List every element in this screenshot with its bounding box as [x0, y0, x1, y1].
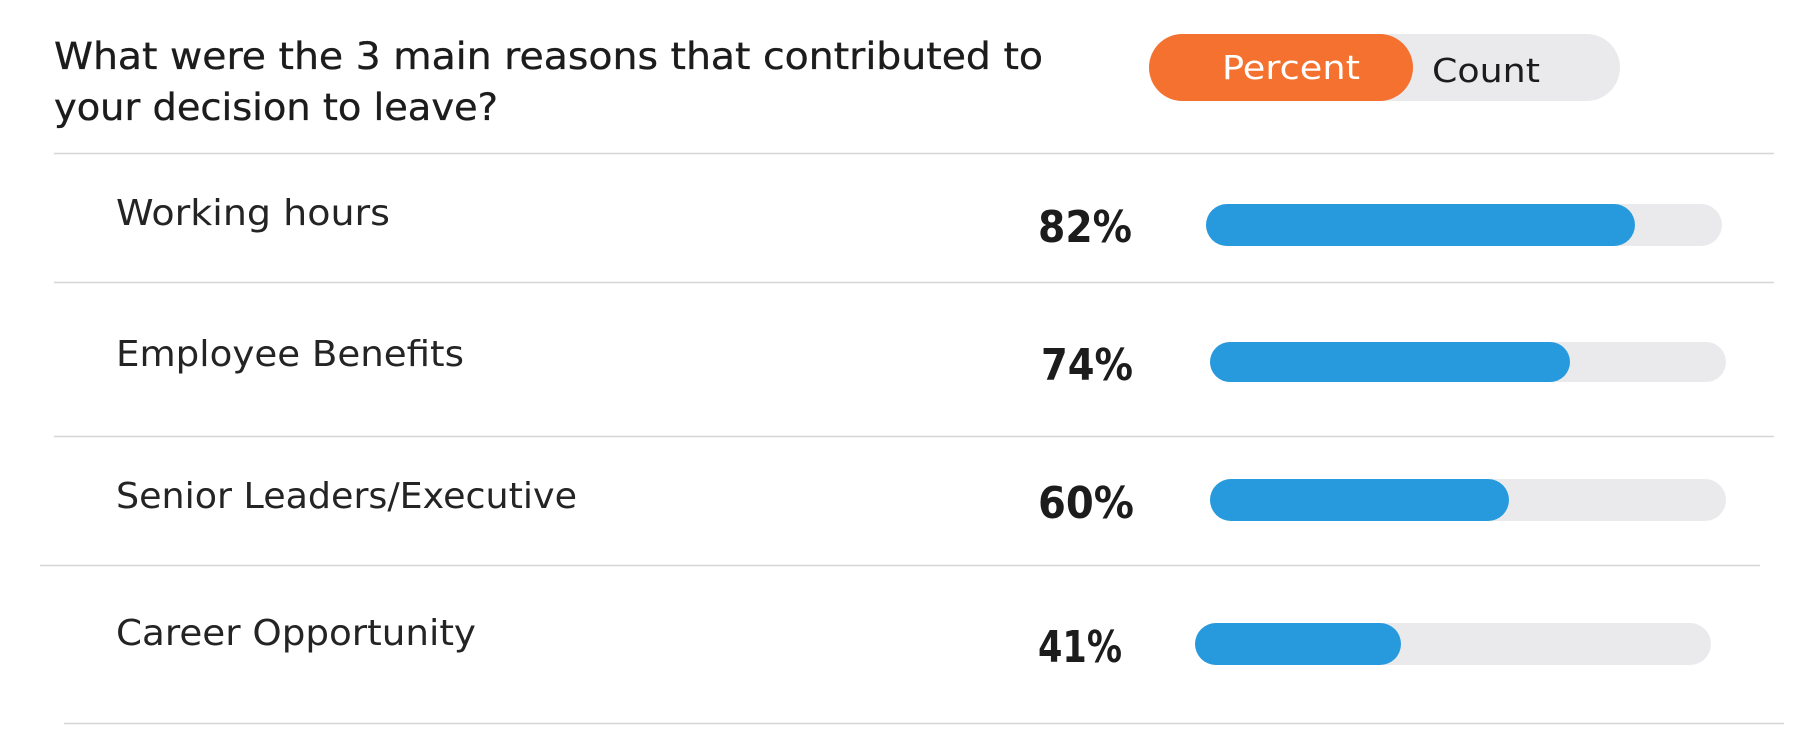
- row: Senior Leaders/Executive: Senior Leaders/Executive: [116, 476, 577, 517]
- row: Employee Benefits: [116, 334, 1726, 391]
- row: Career Opportunity: [116, 613, 1711, 673]
- title: your decision to leave?: [54, 86, 498, 129]
- toggle: percent / count: [1149, 34, 1620, 101]
- row: Employee Benefits: 74%: [1041, 340, 1133, 391]
- row: Senior Leaders/Executive: [116, 476, 1726, 529]
- title: [54, 35, 1043, 129]
- title: What were the 3 main reasons that contributed to: [54, 35, 1043, 78]
- toggle: percent / count: Count: [1432, 51, 1540, 90]
- row: Working hours: 82%: [1038, 202, 1132, 253]
- row: Career Opportunity: Career Opportunity: [116, 613, 476, 654]
- row: Career Opportunity: 41%: [1038, 622, 1122, 673]
- toggle: percent / count: Percent: [1222, 48, 1360, 87]
- row: Employee Benefits: Employee Benefits: [116, 334, 464, 375]
- row: Senior Leaders/Executive: 60%: [1038, 478, 1134, 529]
- row: Working hours: Working hours: [116, 193, 390, 234]
- row: Working hours: [116, 193, 1722, 253]
